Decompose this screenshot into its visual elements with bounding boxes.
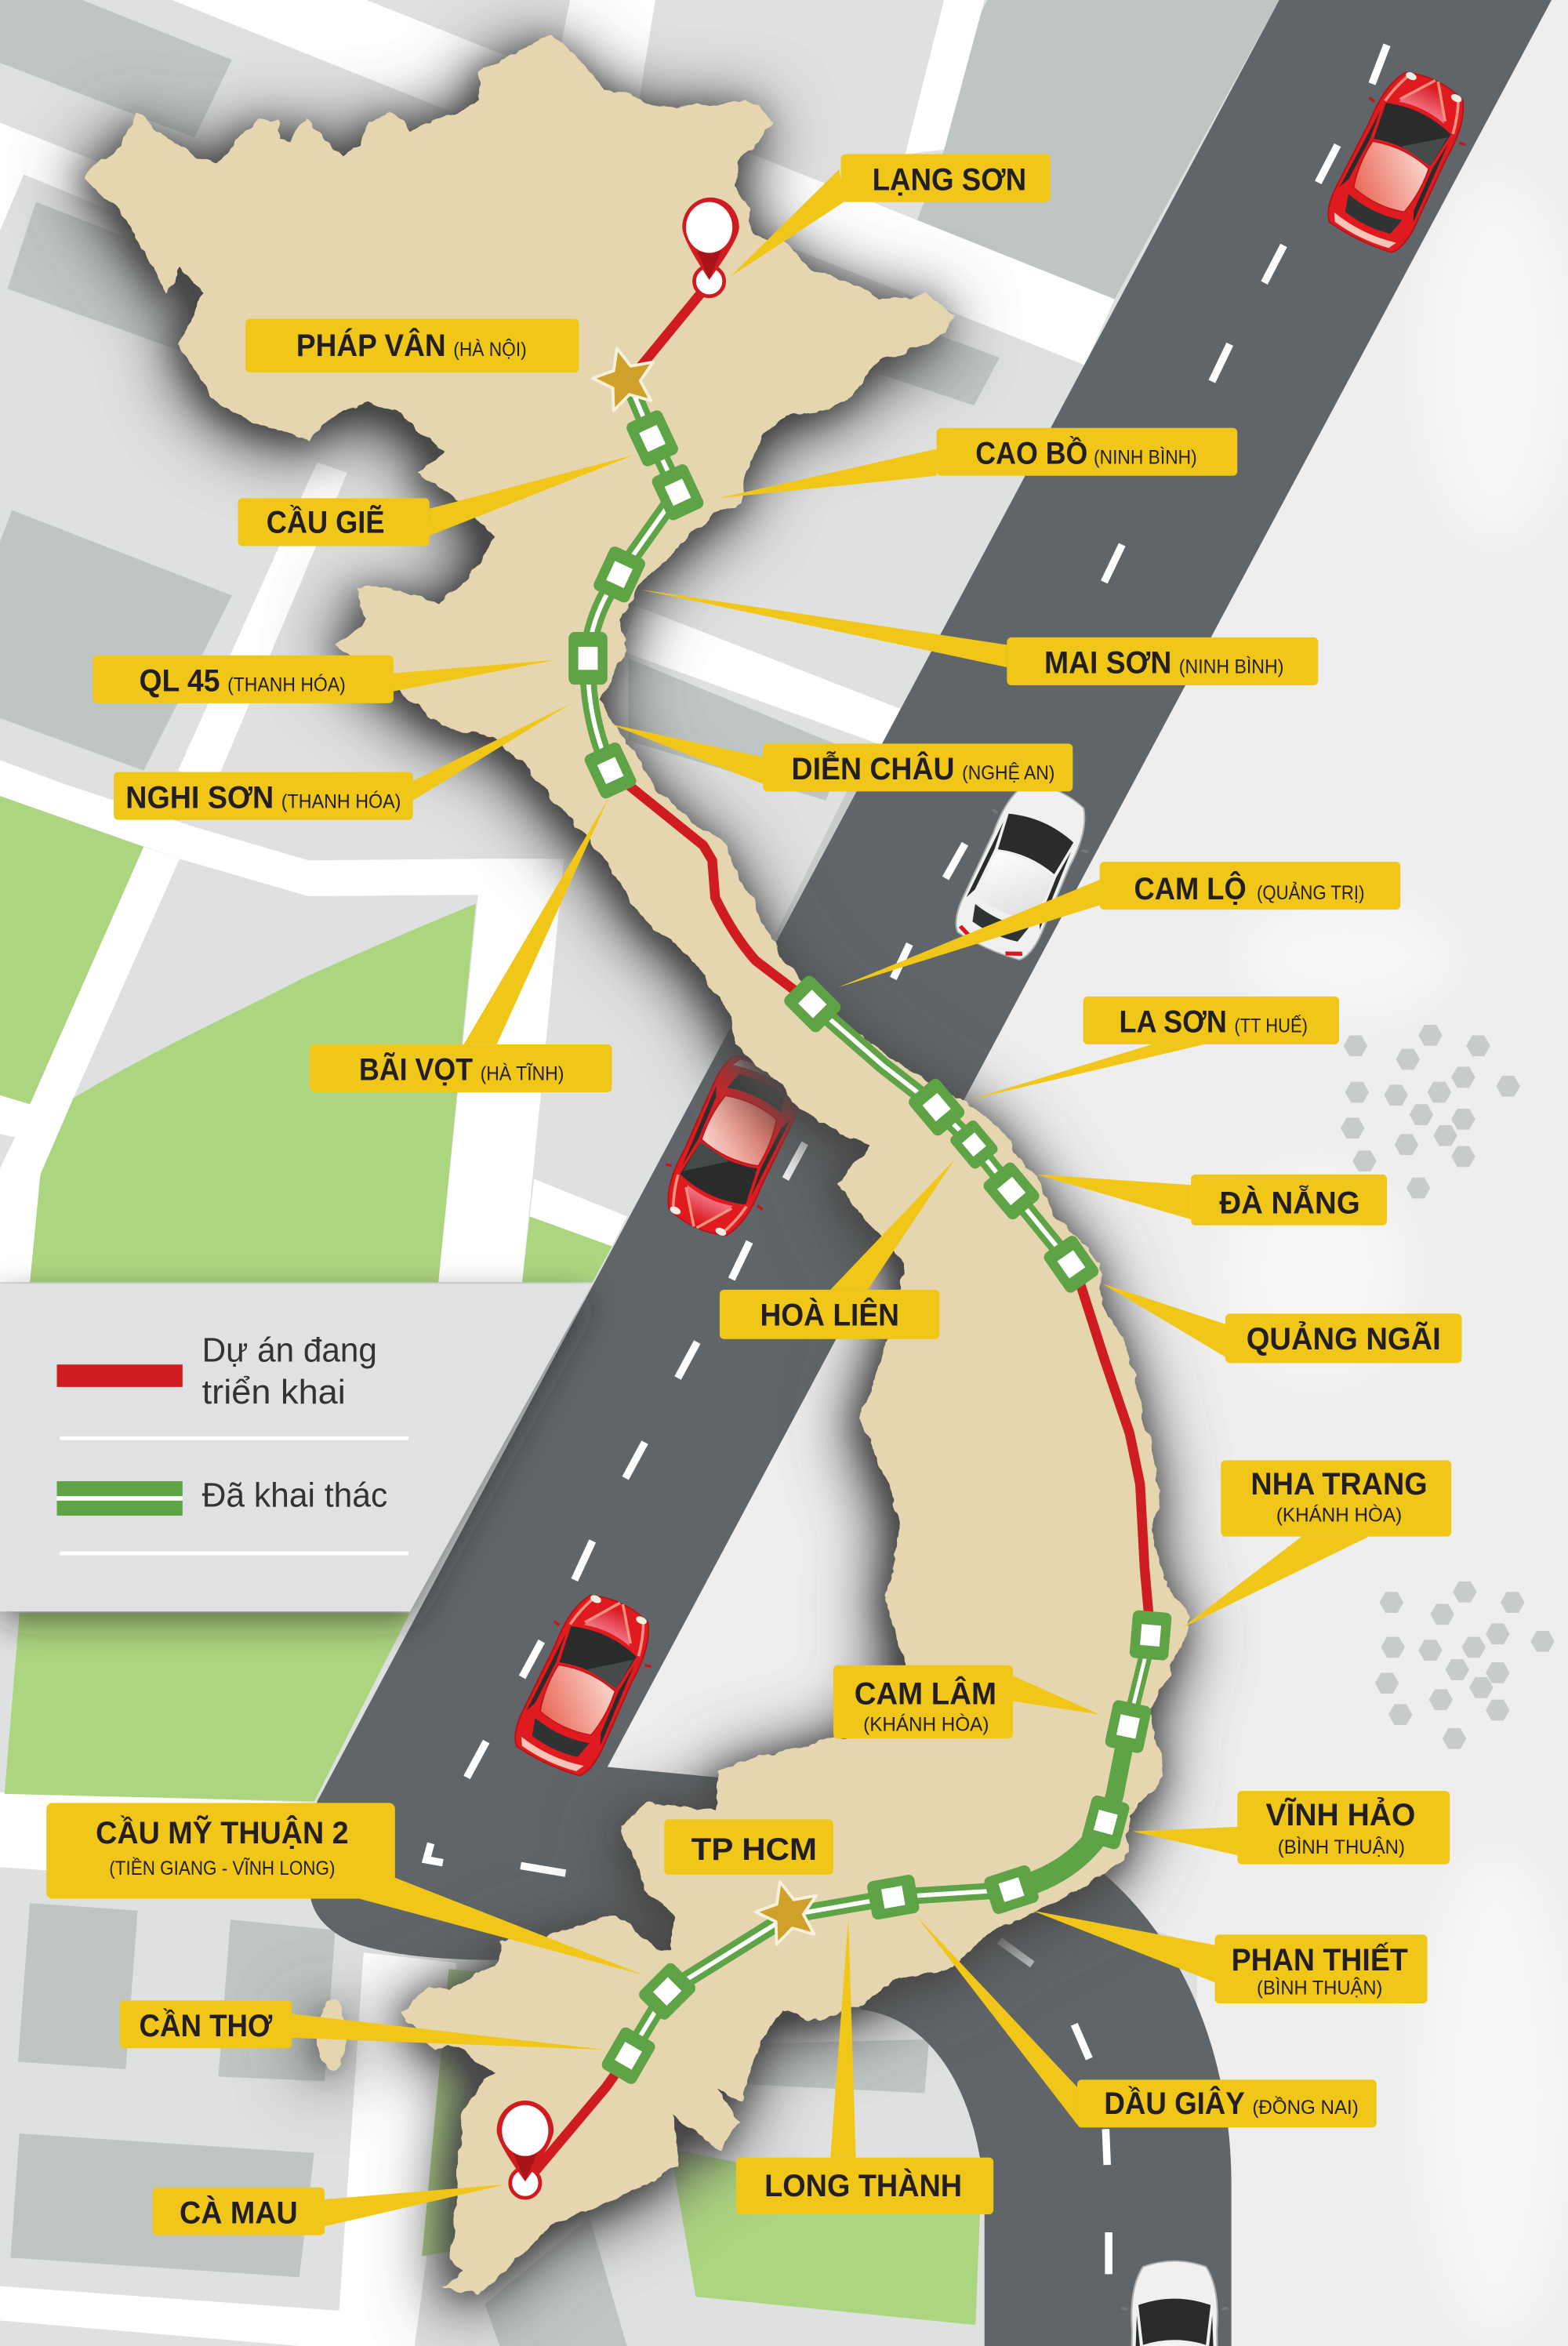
label: La Sơn	[1083, 997, 1339, 1044]
label: QL 45: QL 45	[139, 664, 220, 699]
legend panel: triển khai	[202, 1373, 346, 1411]
label: Phan Thiết: PHAN THIẾT	[1232, 1941, 1408, 1977]
label: Nghi Sơn: NGHI SƠN	[125, 780, 274, 815]
light area east of the road	[608, 0, 1568, 2346]
label: QL 45	[93, 656, 394, 703]
label: Cam Lộ	[1100, 862, 1400, 910]
label: Nghi Sơn: (THANH HÓA)	[281, 791, 401, 812]
label: Nha Trang	[1221, 1460, 1451, 1537]
label: TP HCM	[664, 1819, 833, 1875]
route: sections under construction	[527, 281, 1151, 2181]
label: Quảng Ngãi	[1225, 1313, 1462, 1363]
label: Cam Lộ: (QUẢNG TRỊ)	[1257, 881, 1364, 904]
label: Diễn Châu	[763, 743, 1073, 791]
label: Diễn Châu: DIỄN CHÂU	[792, 750, 955, 786]
label: Phan Thiết	[1215, 1934, 1428, 2003]
label: QL 45: (THANH HÓA)	[227, 675, 346, 696]
label: Mai Sơn: (NINH BÌNH)	[1179, 657, 1283, 678]
label: Nha Trang: (KHÁNH HÒA)	[1276, 1505, 1402, 1527]
legend panel	[0, 1284, 593, 1611]
label: Mai Sơn	[1007, 637, 1318, 685]
cars	[499, 58, 1485, 2346]
label: Bãi Vọt	[310, 1044, 612, 1092]
label: Dầu Giây: (ĐỒNG NAI)	[1252, 2097, 1359, 2119]
label: Cà Mau	[153, 2188, 325, 2235]
map of Vietnam	[84, 33, 1189, 2293]
label: Nghi Sơn	[114, 772, 413, 820]
legend text: in progress: Dự án đang	[202, 1331, 377, 1369]
decorative hexagons	[1341, 1025, 1555, 1749]
label: Đà Nẵng	[1191, 1175, 1387, 1226]
label: Nha Trang: NHA TRANG	[1250, 1467, 1428, 1502]
label: Lạng Sơn	[841, 154, 1051, 202]
label: Bãi Vọt: BÃI VỌT	[359, 1051, 474, 1088]
label: Cam Lâm	[833, 1665, 1013, 1738]
label: Cam Lâm: CAM LÂM	[855, 1675, 996, 1711]
label: Cà Mau: CÀ MAU	[180, 2195, 298, 2231]
label: Cao Bồ	[937, 428, 1237, 476]
label: Cam Lâm: (KHÁNH HÒA)	[863, 1715, 989, 1736]
label: Vĩnh Hảo	[1237, 1791, 1450, 1865]
label pointers	[292, 169, 1369, 2226]
label: Lạng Sơn: LẠNG SƠN	[873, 162, 1026, 197]
label: TP HCM: TP HCM	[691, 1832, 817, 1867]
label: La Sơn: LA SƠN	[1119, 1005, 1227, 1040]
route stations	[568, 409, 1172, 2086]
label: Diễn Châu: (NGHỆ AN)	[962, 763, 1054, 784]
label: Cầu Giẽ: CẦU GIẼ	[267, 503, 384, 539]
label: Quảng Ngãi: QUẢNG NGÃI	[1247, 1320, 1441, 1356]
label: Cầu Giẽ	[238, 498, 430, 546]
label: Cần Thơ: CẦN THƠ	[139, 2007, 273, 2043]
label: Cao Bồ: CAO BỒ	[975, 435, 1087, 471]
label: Cầu Mỹ Thuận 2: (TIỀN GIANG - VĨNH LONG)	[109, 1858, 335, 1879]
road dashes	[426, 45, 1387, 2274]
main road	[310, 0, 1552, 2346]
pin: Lạng Sơn	[682, 198, 739, 296]
label: Vĩnh Hảo: (BÌNH THUẬN)	[1278, 1837, 1405, 1858]
label: Pháp Vân	[245, 318, 579, 372]
star: TP HCM	[756, 1882, 816, 1945]
label: Hoà Liên	[720, 1290, 939, 1339]
island	[318, 2000, 347, 2069]
label: Dầu Giây: DẦU GIÂY	[1104, 2085, 1245, 2121]
route: sections in operation	[588, 382, 1151, 2056]
label: La Sơn: (TT HUẾ)	[1234, 1015, 1308, 1037]
label: Cao Bồ: (NINH BÌNH)	[1094, 448, 1197, 469]
label: Cần Thơ	[120, 2000, 292, 2048]
label: Vĩnh Hảo: VĨNH HẢO	[1266, 1796, 1415, 1832]
label: Pháp Vân: PHÁP VÂN	[296, 327, 446, 363]
label: Cầu Mỹ Thuận 2	[46, 1803, 395, 1898]
star: Pháp Vân	[593, 348, 653, 411]
label: Long Thành: LONG THÀNH	[764, 2168, 962, 2203]
label: Cầu Mỹ Thuận 2: CẦU MỸ THUẬN 2	[96, 1814, 349, 1850]
legend: red line	[57, 1364, 183, 1387]
label: Hoà Liên: HOÀ LIÊN	[760, 1297, 899, 1333]
label: Đà Nẵng: ĐÀ NẴNG	[1219, 1185, 1360, 1221]
label: Phan Thiết: (BÌNH THUẬN)	[1257, 1978, 1382, 1999]
pin: Cà Mau	[497, 2101, 554, 2198]
legend: green line	[57, 1481, 183, 1516]
label: Cam Lộ: CAM LỘ	[1134, 870, 1247, 906]
label: Dầu Giây	[1077, 2079, 1377, 2127]
legend text: in operation: Đã khai thác	[202, 1476, 387, 1515]
label: Pháp Vân: (HÀ NỘI)	[453, 339, 527, 361]
label: Long Thành	[736, 2158, 993, 2214]
label: Bãi Vọt: (HÀ TĨNH)	[481, 1064, 564, 1085]
label: Mai Sơn: MAI SƠN	[1044, 646, 1171, 681]
